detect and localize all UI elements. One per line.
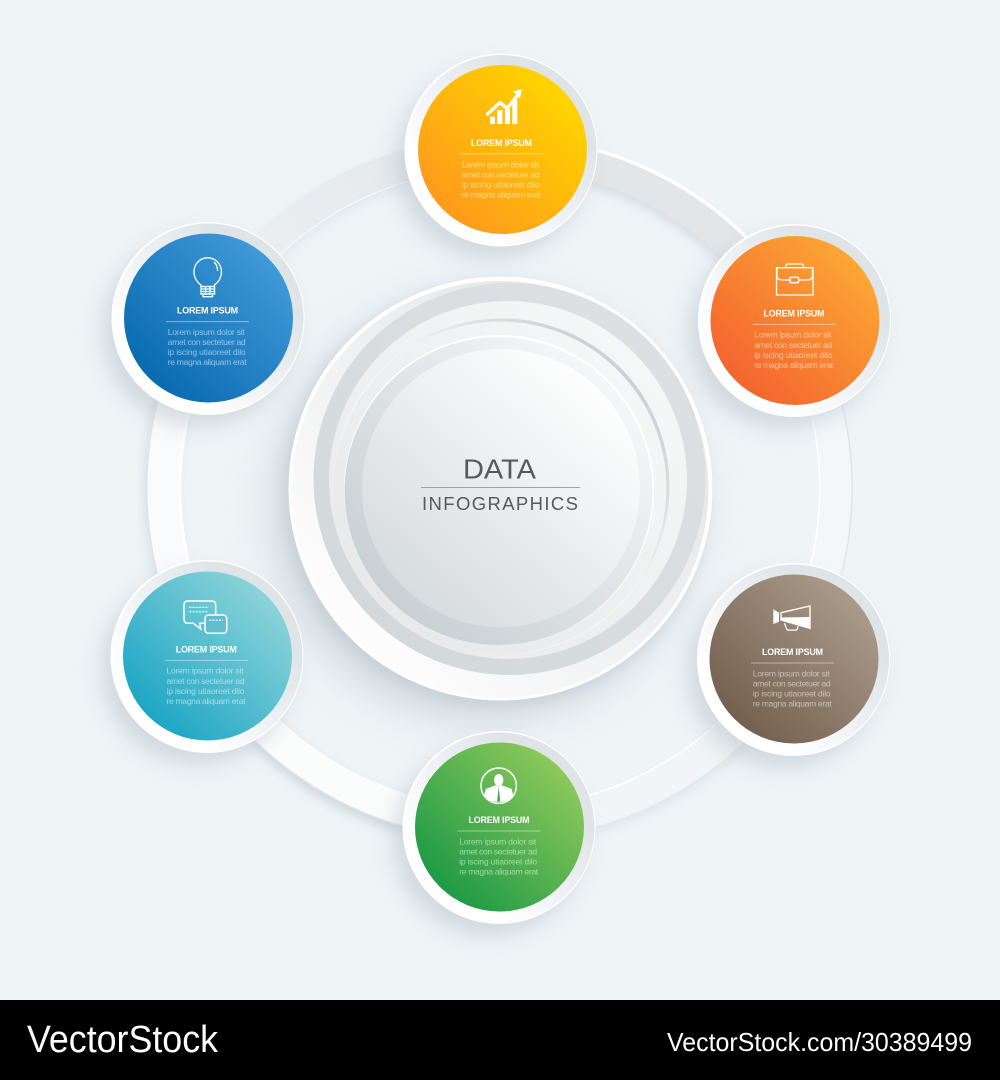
- label block: LOREM IPSUM: [471, 138, 532, 148]
- ring segment: lower right: [500, 648, 796, 830]
- label block: [460, 138, 543, 200]
- icon: light bulb: [194, 258, 221, 297]
- label block: Lorem ipsum dolor sit: [459, 836, 537, 846]
- icon: megaphone: [773, 606, 810, 630]
- footer image id: VectorStock.com/30389499: [667, 1027, 972, 1057]
- icon: briefcase: [776, 264, 813, 295]
- icon: businessman: [481, 768, 516, 803]
- label block: LOREM IPSUM: [762, 647, 823, 657]
- panel: upper left blue circle: [102, 222, 304, 427]
- label block: amet con sectetuer ad: [753, 678, 831, 688]
- ring segment: right side: [777, 312, 852, 664]
- icon: speech bubbles: [184, 601, 227, 633]
- central disc: [270, 276, 712, 722]
- outer connector ring: [160, 136, 852, 840]
- label block: amet con sectetuer ad: [459, 846, 537, 856]
- label block: LOREM IPSUM: [468, 815, 530, 825]
- footer logo text: VectorStock: [27, 1019, 219, 1061]
- label block: LOREM IPSUM: [764, 308, 824, 318]
- ring segment: left side: [160, 320, 223, 656]
- label block: ip iscing utiaoreet dilo: [462, 180, 540, 190]
- label block: amet con sectetuer ad: [754, 340, 832, 350]
- panel: upper right orange circle: [688, 224, 891, 429]
- label block: [165, 644, 248, 706]
- ring segment: upper left to top: [209, 152, 500, 328]
- label block: LOREM IPSUM: [177, 306, 238, 316]
- icon: growth chart: [486, 89, 522, 124]
- label block: ip iscing utiaoreet dilo: [167, 686, 245, 696]
- ring segment: top to upper right: [500, 136, 804, 323]
- label block: Lorem ipsum dolor sit: [462, 159, 539, 169]
- label block: re magna aliquam erat: [753, 698, 832, 708]
- label block: amet con sectetuer ad: [167, 676, 245, 686]
- label block: [752, 308, 836, 370]
- panel: top yellow circle: [395, 54, 598, 259]
- label block: amet con sectetuer ad: [462, 170, 540, 180]
- heading: DATA: DATA: [463, 453, 536, 484]
- label block: [166, 306, 249, 367]
- label block: re magna aliquam erat: [754, 360, 834, 370]
- label block: Lorem ipsum dolor sit: [754, 330, 832, 340]
- label block: re magna aliquam erat: [462, 190, 541, 200]
- label block: [751, 647, 834, 708]
- label block: LOREM IPSUM: [176, 644, 237, 654]
- panel: bottom green circle: [393, 731, 596, 936]
- label block: ip iscing utiaoreet dilo: [168, 347, 246, 357]
- label block: ip iscing utiaoreet dilo: [459, 856, 537, 866]
- label block: re magna aliquam erat: [459, 866, 539, 876]
- panel: lower right brown circle: [687, 563, 890, 768]
- label block: Lorem ipsum dolor sit: [753, 668, 830, 678]
- label block: Lorem ipsum dolor sit: [168, 327, 245, 337]
- ring segment: lower left: [195, 656, 500, 840]
- label block: ip iscing utiaoreet dilo: [754, 350, 832, 360]
- footer bar: [0, 1000, 1000, 1080]
- label block: [458, 815, 540, 876]
- label block: re magna aliquam erat: [167, 696, 246, 706]
- label block: amet con sectetuer ad: [168, 337, 246, 347]
- label block: Lorem ipsum dolor sit: [167, 666, 244, 676]
- label block: re magna aliquam erat: [168, 357, 247, 367]
- subheading: INFOGRAPHICS: INFOGRAPHICS: [422, 493, 578, 514]
- center title: [421, 453, 580, 514]
- label block: ip iscing utiaoreet dilo: [753, 688, 831, 698]
- panel: lower left teal circle: [101, 560, 304, 765]
